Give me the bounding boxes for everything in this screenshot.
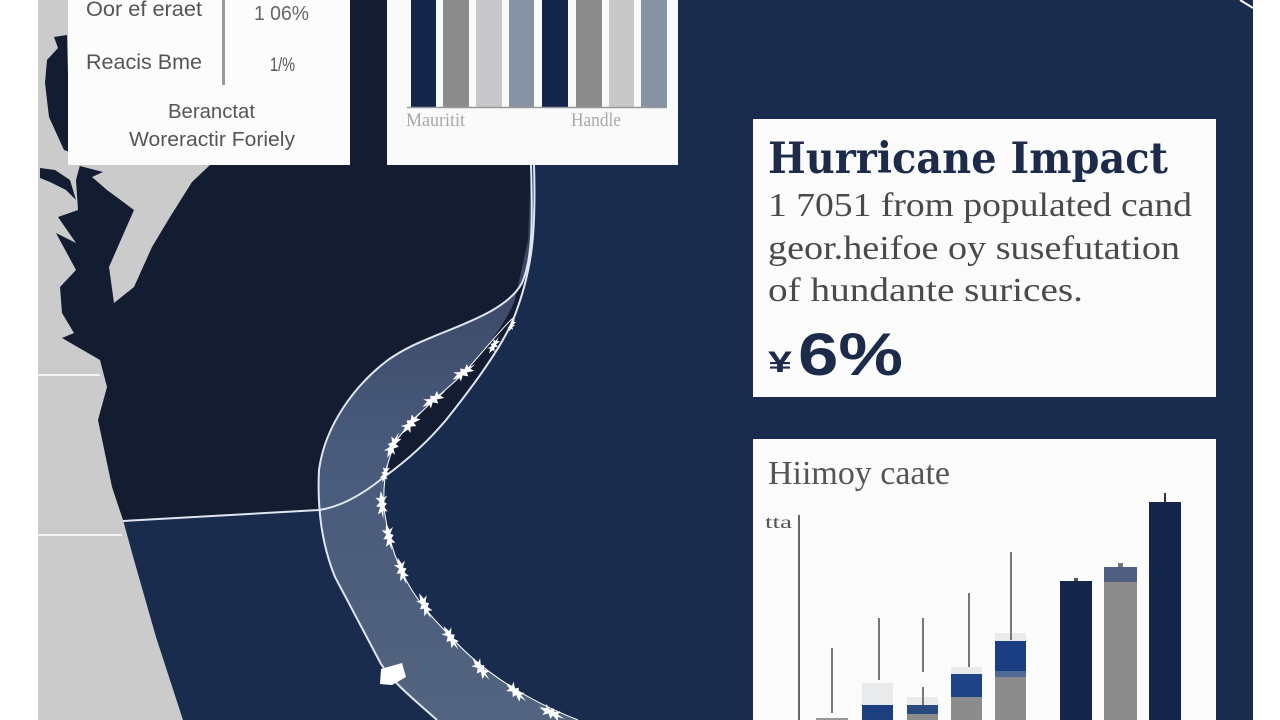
table caption: Woreractir Foriely [129,129,295,151]
table caption: Beranctat [168,101,255,123]
hurricane track swath [123,165,578,720]
column 2 [862,618,893,720]
table divider [222,0,225,85]
bars [411,0,667,107]
storm direction arrow [380,663,406,685]
panel: grouped bar chart [387,0,678,165]
dark northern water [40,0,532,521]
corner accent line [1240,0,1253,8]
panel: hurricane impact [753,119,1216,397]
table caption [129,101,295,151]
heading: Hurricane Impact [768,134,1168,184]
key figure: ¥ [768,346,792,379]
panel: column chart [753,439,1216,720]
row 2 value: 1/% [270,55,295,76]
column 7 [1104,563,1137,720]
axis label left: Mauritit [406,110,466,131]
column 6 [1060,578,1092,720]
chart title: Hiimoy caate [768,455,950,492]
column 5 [995,552,1026,720]
panel: statistics table [68,0,350,165]
storm feather track [375,317,578,720]
axis label right: Handle [571,110,621,131]
column 4 [951,593,982,720]
y axis [798,515,800,720]
row 2 label: Reacis Bme [86,51,202,74]
body text [768,187,1192,309]
body text: geor.heifoe oy susefutation [768,230,1180,267]
row 1 value: 1 06% [254,3,309,25]
key figure [768,321,903,388]
column 1 [816,648,848,720]
column 3 [907,618,938,720]
body text: of hundante surices. [768,272,1083,309]
key figure: 6% [798,321,903,388]
y axis label: tta [765,512,792,532]
body text: 1 7051 from populated cand [768,187,1192,224]
column 8 [1149,493,1181,720]
map: land masses [38,0,210,720]
